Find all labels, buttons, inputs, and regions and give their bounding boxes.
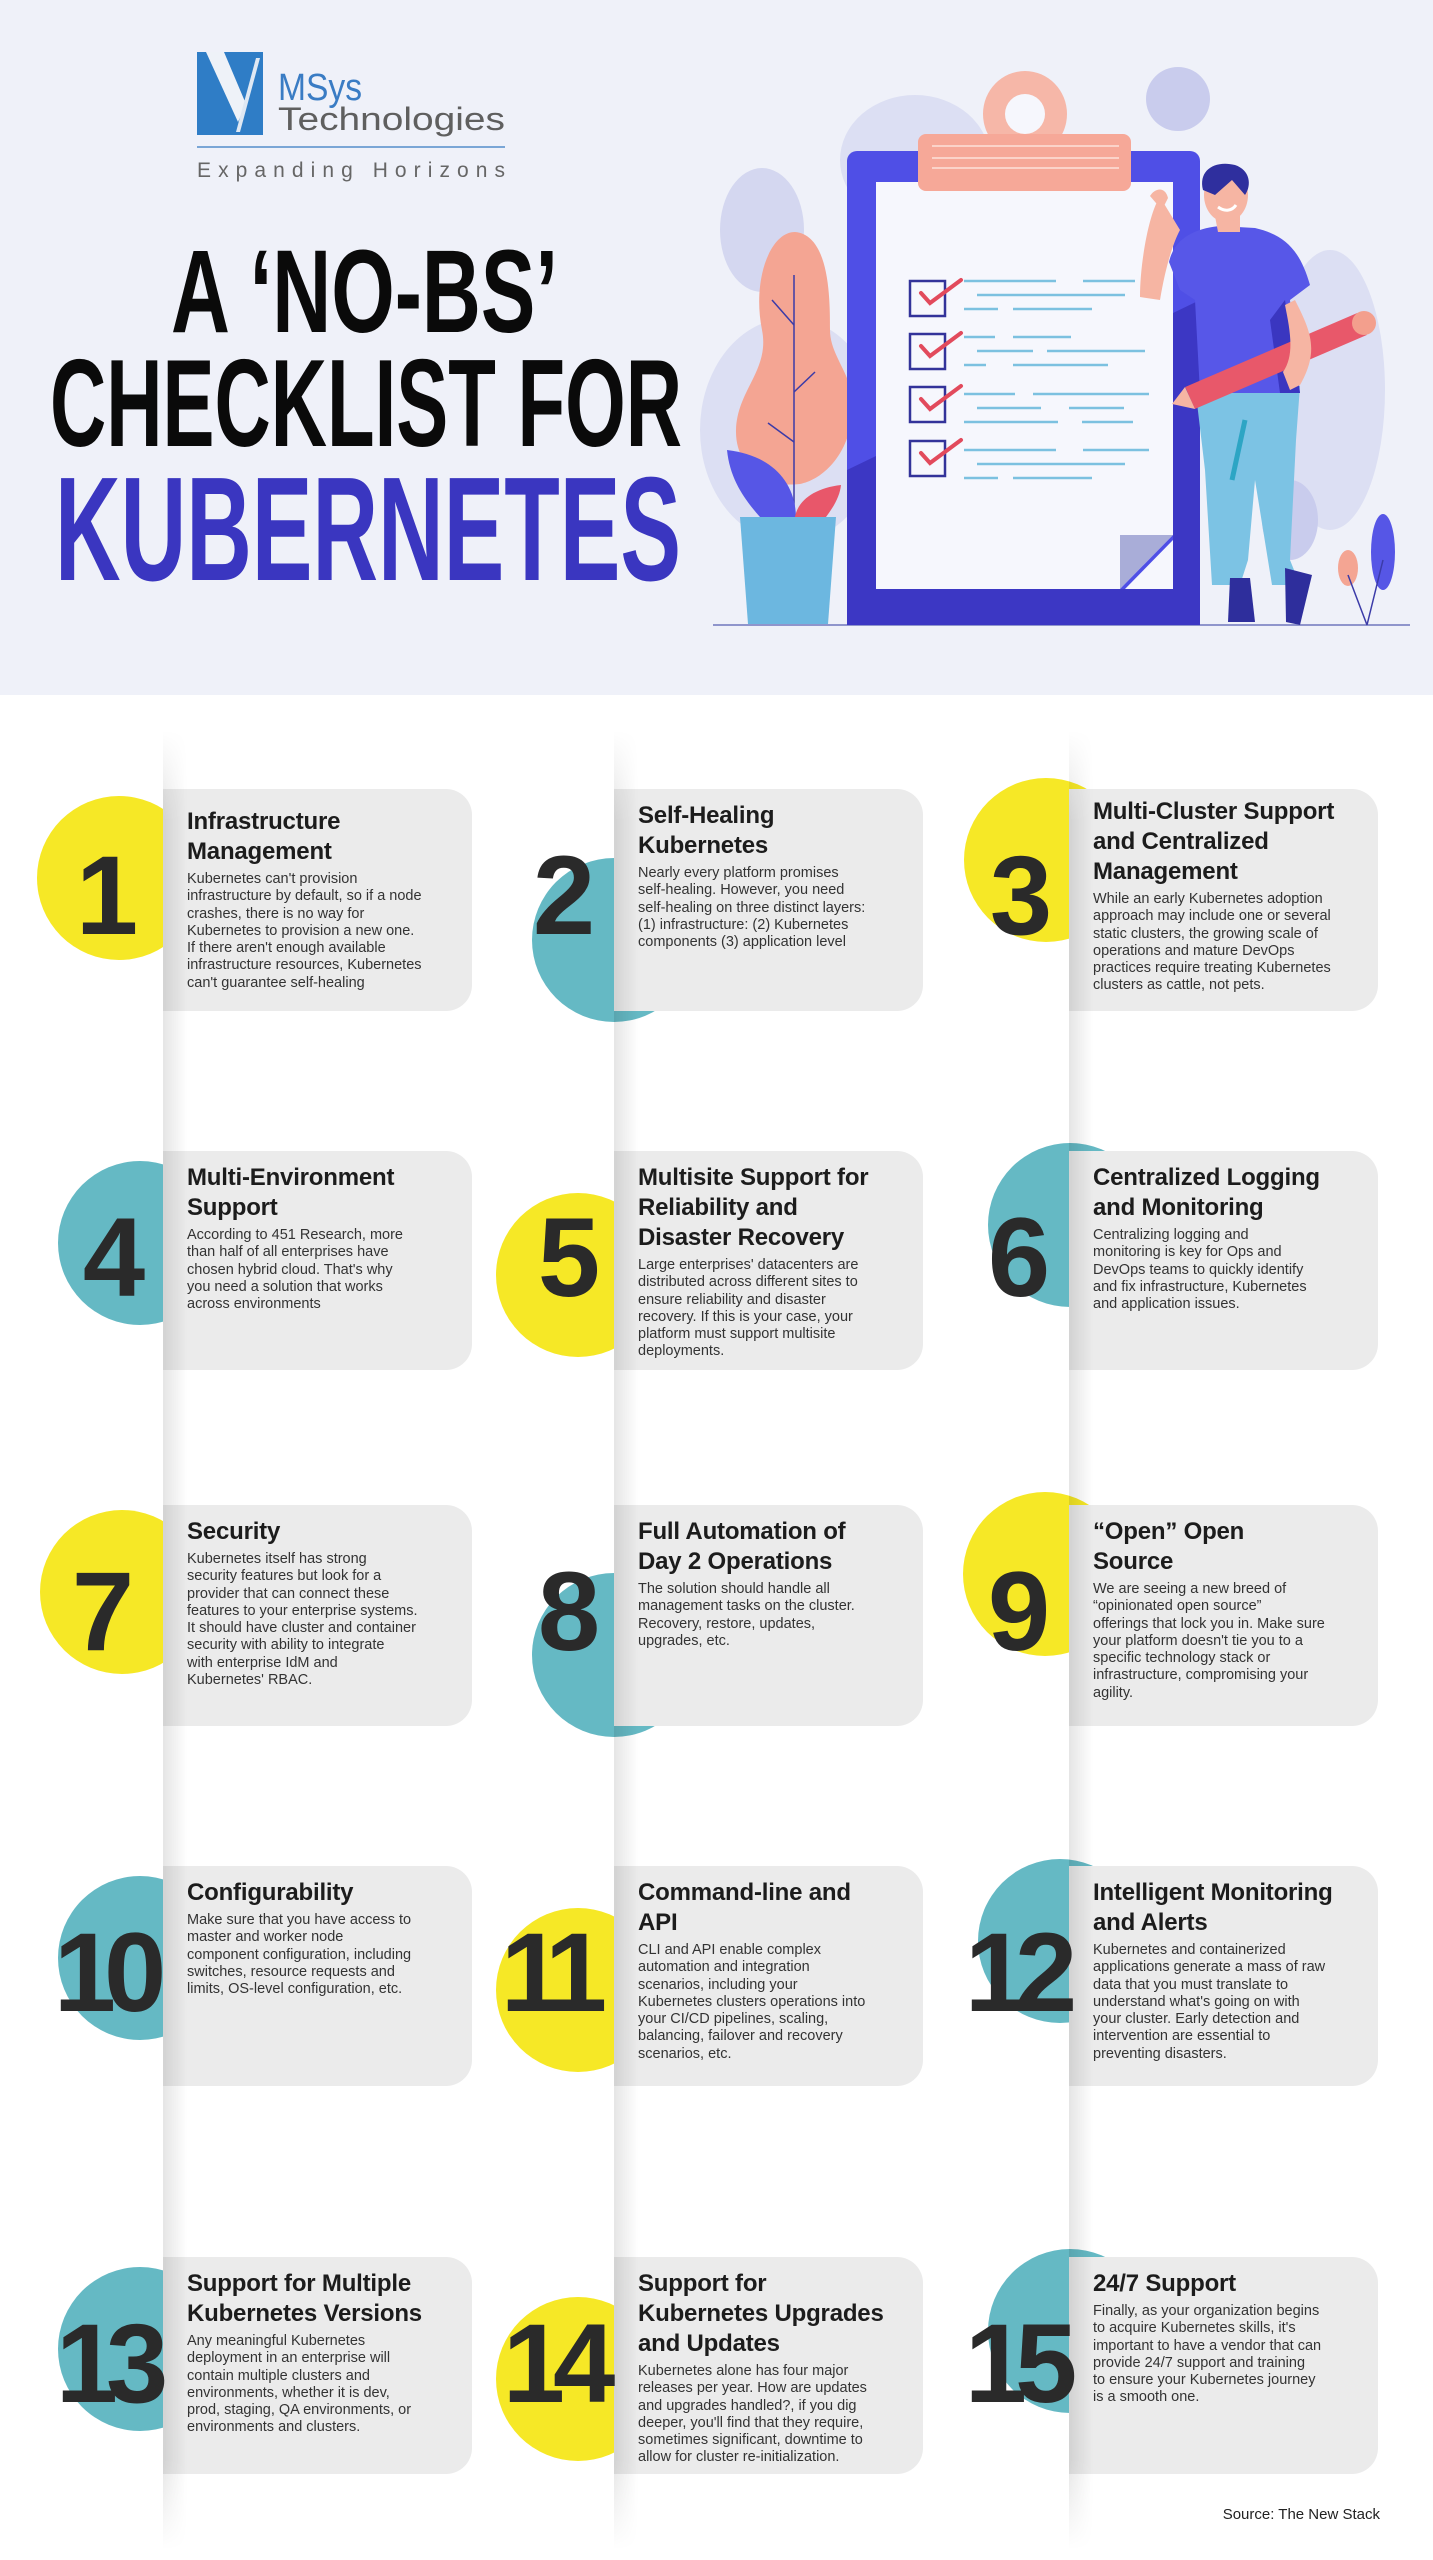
- item 3: Multi-Cluster Support: [964, 778, 1378, 1011]
- number 5: 5: [538, 1195, 600, 1320]
- item 11: Command-line and API: [496, 1866, 923, 2086]
- card 10: Make sure that you have access to: [187, 1912, 411, 1928]
- card 1: If there aren't enough available: [187, 940, 386, 956]
- card 10: switches, resource requests and: [187, 1964, 395, 1980]
- card 13: Any meaningful Kubernetes: [187, 2333, 365, 2349]
- card 2: Nearly every platform promises: [638, 865, 839, 881]
- card 9: [1069, 1505, 1378, 1726]
- logo: [197, 52, 505, 182]
- card 1: Kubernetes to provision a new one.: [187, 923, 414, 939]
- card 11: Command-line and: [638, 1879, 851, 1906]
- card 1: Kubernetes can't provision: [187, 871, 357, 887]
- card 10: master and worker node: [187, 1929, 343, 1945]
- card 7: It should have cluster and container: [187, 1620, 416, 1636]
- card 7: Kubernetes itself has strong: [187, 1551, 367, 1567]
- number 13: 13: [56, 2301, 156, 2426]
- card 10: limits, OS-level configuration, etc.: [187, 1981, 402, 1997]
- card 6: monitoring is key for Ops and: [1093, 1244, 1282, 1260]
- number 12: 12: [965, 1910, 1065, 2035]
- number 8: 8: [538, 1549, 600, 1674]
- card 11: balancing, failover and recovery: [638, 2028, 843, 2044]
- card 14: Support for: [638, 2270, 766, 2297]
- card 2: Self-Healing: [638, 802, 774, 829]
- card 14: and Updates: [638, 2330, 780, 2357]
- card 12: Kubernetes and containerized: [1093, 1942, 1286, 1958]
- number 11: 11: [501, 1910, 595, 2035]
- card 14: sometimes significant, downtime to: [638, 2432, 863, 2448]
- circle 4: [58, 1161, 222, 1325]
- circle 1: [37, 796, 201, 960]
- circle 2: [532, 858, 696, 1022]
- card 13: contain multiple clusters and: [187, 2368, 370, 2384]
- clipboard: [847, 151, 1200, 625]
- circle 9: [963, 1492, 1127, 1656]
- card 3: While an early Kubernetes adoption: [1093, 891, 1323, 907]
- card 9: your platform doesn't tie you to a: [1093, 1633, 1303, 1649]
- card 9: “opinionated open source”: [1093, 1598, 1261, 1614]
- number 10: 10: [54, 1910, 154, 2035]
- card 3: approach may include one or several: [1093, 908, 1331, 924]
- card 5: recovery. If this is your case, your: [638, 1309, 853, 1325]
- title: [50, 230, 682, 590]
- pencil: [1190, 324, 1362, 398]
- number 3: 3: [990, 833, 1052, 958]
- background blobs: [720, 168, 804, 292]
- item 4: Multi-Environment Support: [58, 1151, 472, 1370]
- item 1: Infrastructure Management: [37, 789, 472, 1011]
- card 11: API: [638, 1909, 677, 1936]
- card 3: Management: [1093, 858, 1238, 885]
- number 1: 1: [76, 833, 138, 958]
- card 4: chosen hybrid cloud. That's why: [187, 1262, 393, 1278]
- card 5: distributed across different sites to: [638, 1274, 858, 1290]
- card 15: [1069, 2257, 1378, 2474]
- card 15: provide 24/7 support and training: [1093, 2355, 1305, 2371]
- card 5: deployments.: [638, 1343, 724, 1359]
- card 12: your cluster. Early detection and: [1093, 2011, 1299, 2027]
- card 1: [163, 789, 472, 1011]
- number 9: 9: [988, 1549, 1050, 1674]
- card 11: your CI/CD pipelines, scaling,: [638, 2011, 828, 2027]
- number 14: 14: [503, 2301, 603, 2426]
- card 15: to ensure your Kubernetes journey: [1093, 2372, 1315, 2388]
- circle 5: [496, 1193, 660, 1357]
- card 12: preventing disasters.: [1093, 2046, 1227, 2062]
- card 3: operations and mature DevOps: [1093, 943, 1294, 959]
- card 9: “Open” Open: [1093, 1518, 1244, 1545]
- card 6: and fix infrastructure, Kubernetes: [1093, 1279, 1307, 1295]
- card 7: provider that can connect these: [187, 1586, 389, 1602]
- card 7: security features but look for a: [187, 1568, 381, 1584]
- card 1: infrastructure by default, so if a node: [187, 888, 422, 904]
- item 6: Centralized Logging and Monitoring: [988, 1143, 1378, 1370]
- card 4: than half of all enterprises have: [187, 1244, 389, 1260]
- number 15: 15: [965, 2301, 1065, 2426]
- card 11: [614, 1866, 923, 2086]
- circle 8: [532, 1573, 696, 1737]
- card 4: Multi-Environment: [187, 1164, 394, 1191]
- card 9: infrastructure, compromising your: [1093, 1667, 1308, 1683]
- card 6: [1069, 1151, 1378, 1370]
- card 5: Reliability and: [638, 1194, 798, 1221]
- logo: Expanding Horizons: [197, 159, 505, 182]
- card 8: management tasks on the cluster.: [638, 1598, 855, 1614]
- item 2: Self-Healing Kubernetes: [532, 789, 923, 1022]
- card 7: with enterprise IdM and: [187, 1655, 338, 1671]
- card 15: to acquire Kubernetes skills, it's: [1093, 2320, 1296, 2336]
- card 14: deeper, you'll find that they require,: [638, 2415, 863, 2431]
- number 7: 7: [72, 1549, 134, 1674]
- card 12: intervention are essential to: [1093, 2028, 1270, 2044]
- card 3: static clusters, the growing scale of: [1093, 926, 1318, 942]
- shadow strips: [163, 760, 179, 2520]
- card 9: offerings that lock you in. Make sure: [1093, 1616, 1325, 1632]
- card 3: practices require treating Kubernetes: [1093, 960, 1331, 976]
- circle 13: [58, 2267, 222, 2431]
- card 12: Intelligent Monitoring: [1093, 1879, 1333, 1906]
- card 5: [614, 1151, 923, 1370]
- card 10: component configuration, including: [187, 1947, 411, 1963]
- card 5: Disaster Recovery: [638, 1224, 844, 1251]
- card 4: According to 451 Research, more: [187, 1227, 403, 1243]
- card 1: Infrastructure: [187, 808, 340, 835]
- number 4: 4: [83, 1195, 145, 1320]
- card 2: components (3) application level: [638, 934, 846, 950]
- card 12: applications generate a mass of raw: [1093, 1959, 1325, 1975]
- card 5: Large enterprises' datacenters are: [638, 1257, 858, 1273]
- card 14: Kubernetes alone has four major: [638, 2363, 848, 2379]
- card 8: upgrades, etc.: [638, 1633, 730, 1649]
- card 13: [163, 2257, 472, 2474]
- card 3: [1069, 789, 1378, 1011]
- card 12: [1069, 1866, 1378, 2086]
- card 1: Management: [187, 838, 332, 865]
- card 11: Kubernetes clusters operations into: [638, 1994, 865, 2010]
- circle 12: [978, 1859, 1142, 2023]
- card 13: Kubernetes Versions: [187, 2300, 422, 2327]
- circle 10: [58, 1876, 222, 2040]
- card 13: environments, whether it is dev,: [187, 2385, 390, 2401]
- item 12: Intelligent Monitoring and Alerts: [965, 1859, 1378, 2086]
- item 7: Security: [40, 1505, 472, 1726]
- card 9: Source: [1093, 1548, 1173, 1575]
- circle 14: [496, 2297, 660, 2461]
- plant: [736, 232, 853, 485]
- man: [1140, 197, 1180, 300]
- illustration: clipboard with man and plants: [700, 67, 1410, 626]
- card 7: [163, 1505, 472, 1726]
- ground line: [713, 624, 1410, 626]
- card 2: self-healing on three distinct layers:: [638, 900, 865, 916]
- source note: Source: The New Stack: [1223, 2506, 1380, 2523]
- card 5: platform must support multisite: [638, 1326, 835, 1342]
- logo: MSys: [278, 67, 362, 109]
- clip: [983, 71, 1067, 157]
- circle 6: [988, 1143, 1152, 1307]
- header background: [0, 0, 1433, 695]
- card 7: security with ability to integrate: [187, 1637, 384, 1653]
- item 13: Support for Multiple Kubernetes Versions: [56, 2257, 472, 2474]
- card 4: Support: [187, 1194, 278, 1221]
- circle 7: [40, 1510, 204, 1674]
- number 6: 6: [988, 1195, 1050, 1320]
- card 15: is a smooth one.: [1093, 2389, 1199, 2405]
- card 9: We are seeing a new breed of: [1093, 1581, 1286, 1597]
- logo: Technologies: [278, 101, 505, 137]
- card 6: DevOps teams to quickly identify: [1093, 1262, 1303, 1278]
- item 14: Support for Kubernetes Upgrades and Updates: [496, 2257, 923, 2474]
- item 15: 24/7 Support: [965, 2249, 1378, 2474]
- card 7: features to your enterprise systems.: [187, 1603, 418, 1619]
- card 13: deployment in an enterprise will: [187, 2350, 390, 2366]
- card 14: releases per year. How are updates: [638, 2380, 867, 2396]
- card 4: you need a solution that works: [187, 1279, 383, 1295]
- small right plant: [1371, 514, 1395, 590]
- card 11: scenarios, including your: [638, 1977, 798, 1993]
- card 5: ensure reliability and disaster: [638, 1292, 826, 1308]
- card 3: Multi-Cluster Support: [1093, 798, 1334, 825]
- card 10: [163, 1866, 472, 2086]
- card 1: can't guarantee self-healing: [187, 975, 365, 991]
- card 2: [614, 789, 923, 1011]
- card 9: agility.: [1093, 1685, 1133, 1701]
- item 10: Configurability: [54, 1866, 472, 2086]
- card 14: allow for cluster re-initialization.: [638, 2449, 839, 2465]
- card 7: Kubernetes' RBAC.: [187, 1672, 312, 1688]
- card 3: clusters as cattle, not pets.: [1093, 977, 1265, 993]
- card 5: Multisite Support for: [638, 1164, 868, 1191]
- card 12: understand what's going on with: [1093, 1994, 1300, 2010]
- card 14: [614, 2257, 923, 2474]
- card 3: and Centralized: [1093, 828, 1269, 855]
- card 14: Kubernetes Upgrades: [638, 2300, 884, 2327]
- card 10: Configurability: [187, 1879, 353, 1906]
- card 8: Full Automation of: [638, 1518, 845, 1545]
- item 5: Multisite Support: [496, 1151, 923, 1370]
- card 6: and Monitoring: [1093, 1194, 1264, 1221]
- card 7: Security: [187, 1518, 280, 1545]
- card 8: Day 2 Operations: [638, 1548, 832, 1575]
- card 1: infrastructure resources, Kubernetes: [187, 957, 422, 973]
- circle 15: [988, 2249, 1152, 2413]
- item 9: Open Source: [963, 1492, 1378, 1726]
- circle 11: [496, 1908, 660, 2072]
- card 2: self-healing. However, you need: [638, 882, 844, 898]
- card 11: scenarios, etc.: [638, 2046, 732, 2062]
- circle 3: [964, 778, 1128, 942]
- card 8: [614, 1505, 923, 1726]
- card 6: and application issues.: [1093, 1296, 1240, 1312]
- card 8: Recovery, restore, updates,: [638, 1616, 815, 1632]
- card 13: prod, staging, QA environments, or: [187, 2402, 411, 2418]
- card 11: CLI and API enable complex: [638, 1942, 821, 1958]
- checklist rows: [910, 280, 961, 476]
- card 12: and Alerts: [1093, 1909, 1207, 1936]
- card 6: Centralizing logging and: [1093, 1227, 1249, 1243]
- card 11: automation and integration: [638, 1959, 810, 1975]
- card 4: across environments: [187, 1296, 321, 1312]
- card 6: Centralized Logging: [1093, 1164, 1320, 1191]
- card 15: Finally, as your organization begins: [1093, 2303, 1319, 2319]
- card 9: specific technology stack or: [1093, 1650, 1270, 1666]
- card 15: 24/7 Support: [1093, 2270, 1236, 2297]
- card 4: [163, 1151, 472, 1370]
- card 15: important to have a vendor that can: [1093, 2338, 1321, 2354]
- card 13: environments and clusters.: [187, 2419, 360, 2435]
- card 1: crashes, there is no way for: [187, 906, 364, 922]
- card 14: and upgrades handled?, if you dig: [638, 2398, 856, 2414]
- card 13: Support for Multiple: [187, 2270, 411, 2297]
- number 2: 2: [533, 833, 595, 958]
- card 2: Kubernetes: [638, 832, 768, 859]
- card 12: data that you must translate to: [1093, 1977, 1288, 1993]
- item 8: Full Automation: [532, 1505, 923, 1737]
- card 8: The solution should handle all: [638, 1581, 830, 1597]
- card 2: (1) infrastructure: (2) Kubernetes: [638, 917, 848, 933]
